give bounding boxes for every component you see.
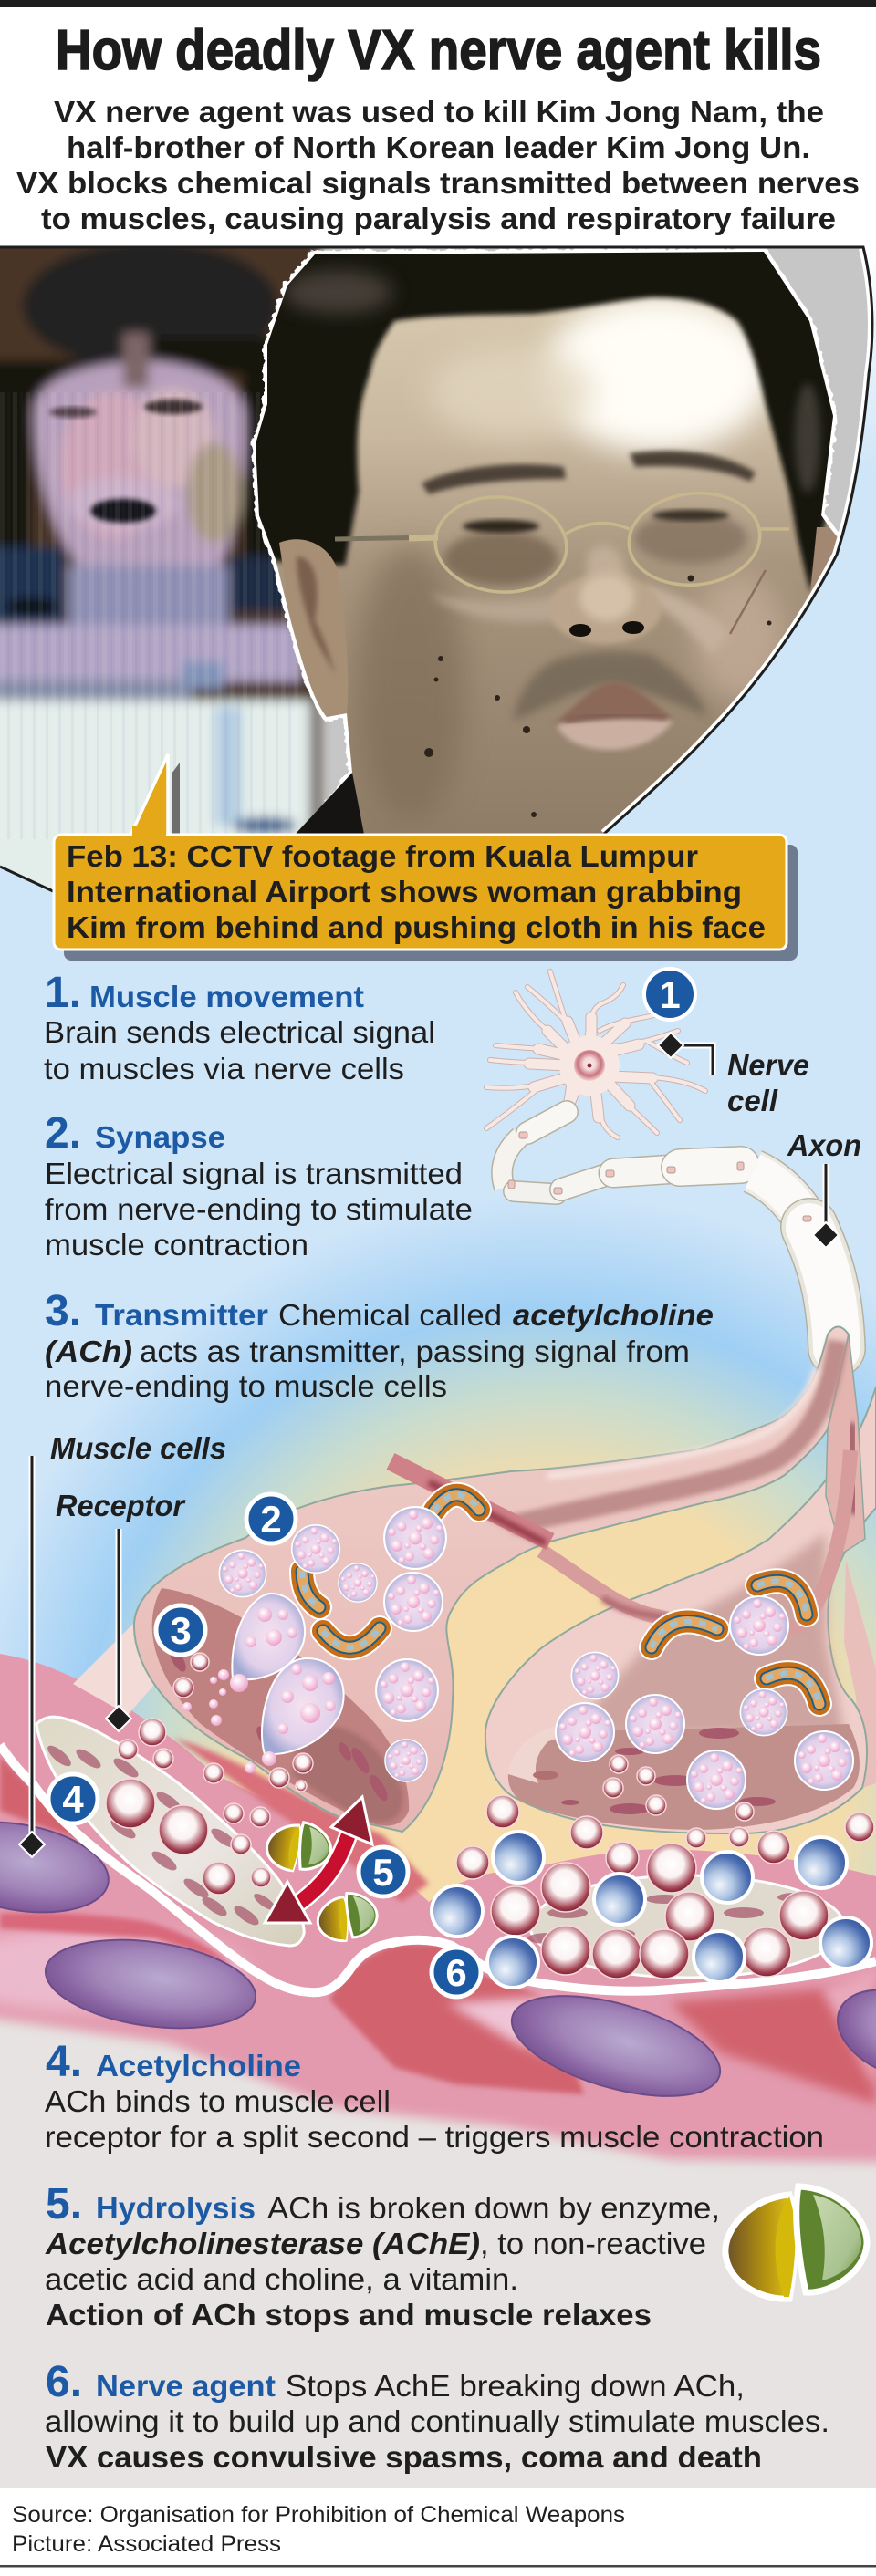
illustration: vesicles releasing ACh — [182, 1594, 344, 1773]
text block: step 3 transmitter: acetylcholine — [513, 1298, 714, 1332]
callout: CCTV caption — [54, 754, 798, 961]
number badge 6 — [432, 1948, 481, 1997]
number badge 4: 4 — [62, 1778, 84, 1821]
text block: step 6 nerve agent — [45, 2358, 829, 2474]
label: nerve cell with leader: Nerve — [727, 1048, 809, 1082]
nerve fibre — [541, 1450, 850, 1629]
cheek highlights — [429, 593, 566, 622]
text block: step 2 synapse: Synapse — [95, 1120, 225, 1154]
icon: muscle nucleus centre — [501, 1976, 731, 2116]
icon: muscle nucleus left — [0, 1809, 116, 1926]
text block: step 4 acetylcholine — [45, 2038, 824, 2154]
text block: step 5 hydrolysis: Acetylcholinesterase (AChE) — [45, 2227, 480, 2260]
eyebrows — [422, 464, 566, 494]
footer: source and credit: Picture: Associated Press — [12, 2531, 281, 2557]
lips — [552, 682, 675, 725]
illustration: muscle tissue — [0, 1623, 876, 2189]
footer: source and credit: Source: Organisation for Prohibition of Chemical Weapons — [12, 2502, 625, 2528]
icon: glasses — [335, 487, 789, 597]
intro text: VX blocks chemical signals transmitted between nerves — [16, 166, 860, 200]
illustration: nerve agent molecules — [432, 1832, 871, 1988]
illustration: acetylcholine molecules — [106, 1653, 874, 1979]
text block: step 3 transmitter: (ACh) — [45, 1335, 132, 1368]
top bar — [0, 0, 876, 7]
number badge 6: 6 — [445, 1951, 467, 1994]
number badge 5: 5 — [372, 1851, 394, 1894]
background: radial glow behind diagram — [0, 1003, 876, 2007]
text block: step 5 hydrolysis — [45, 2180, 720, 2332]
arrow: double-headed reaction arrow — [265, 1797, 372, 1923]
illustration: nerve cell — [486, 971, 705, 1137]
footer: source and credit — [0, 2488, 876, 2576]
text block: step 2 synapse — [45, 1109, 473, 1262]
text block: step 1 muscle movement: to muscles via nerve cells — [44, 1052, 404, 1085]
number badge 3 — [156, 1605, 205, 1655]
illustration: left receptor — [36, 1717, 304, 1946]
icon: AChE enzyme — [725, 2186, 867, 2299]
text block: step 2 synapse: muscle contraction — [45, 1228, 308, 1262]
number badge 2: 2 — [260, 1498, 282, 1541]
text block: step 4 acetylcholine: ACh binds to muscle cell — [45, 2084, 391, 2118]
label: receptor with leader: Receptor — [56, 1489, 186, 1522]
text block: step 3 transmitter — [45, 1287, 714, 1403]
callout: CCTV caption: Feb 13: CCTV footage from Kuala Lumpur — [67, 839, 698, 873]
label: axon with leader: Axon — [787, 1128, 861, 1162]
text block: step 4 acetylcholine: Acetylcholine — [96, 2049, 301, 2083]
hair — [246, 242, 844, 593]
number badge 1 — [644, 969, 695, 1020]
text block: step 3 transmitter: 3. — [45, 1287, 81, 1335]
text block: step 5 hydrolysis: ACh is broken down by enzyme, — [267, 2191, 720, 2225]
text block: step 2 synapse: from nerve-ending to stimulate — [45, 1192, 473, 1226]
label: axon with leader — [787, 1128, 861, 1248]
text block: step 5 hydrolysis: , to non-reactive — [480, 2227, 706, 2260]
text block: step 4 acetylcholine: receptor for a split second – triggers muscle contraction — [45, 2120, 824, 2154]
text block: step 5 hydrolysis: 5. — [46, 2180, 82, 2228]
label: muscle cells with leader — [19, 1431, 226, 1857]
number badge 4 — [48, 1774, 98, 1823]
text block: step 5 hydrolysis: acetic acid and choline, a vitamin. — [45, 2262, 518, 2296]
callout: CCTV caption: Kim from behind and pushing cloth in his face — [67, 910, 766, 944]
text block: step 1 muscle movement — [44, 969, 435, 1085]
receptor pits — [45, 1742, 810, 1944]
text block: step 6 nerve agent: Nerve agent — [96, 2369, 276, 2403]
icon: muscle nucleus right — [825, 1973, 876, 2095]
number badge 1: 1 — [659, 973, 681, 1016]
text block: step 3 transmitter: Chemical called — [278, 1298, 502, 1332]
text block: step 3 transmitter: Transmitter — [95, 1298, 268, 1332]
text block: step 6 nerve agent: VX causes convulsive spasms, coma and death — [46, 2440, 762, 2474]
text block: step 5 hydrolysis: Action of ACh stops and muscle relaxes — [46, 2298, 652, 2332]
illustration: right receptor — [530, 1875, 844, 1978]
intro text: VX nerve agent was used to kill Kim Jong Nam, the — [54, 95, 824, 129]
number badge 2 — [246, 1494, 296, 1543]
photo: Kim Jong Nam portrait — [250, 248, 839, 834]
illustration: right nerve terminal — [485, 1387, 876, 1833]
label: muscle cells with leader: Muscle cells — [50, 1431, 226, 1465]
jacket — [296, 773, 364, 834]
text block: step 3 transmitter: nerve-ending to muscle cells — [45, 1369, 447, 1403]
intro text — [16, 95, 860, 235]
text block: step 4 acetylcholine: 4. — [46, 2038, 82, 2086]
number badge 5 — [359, 1847, 408, 1896]
text block: step 1 muscle movement: Brain sends electrical signal — [44, 1015, 435, 1049]
intro text: half-brother of North Korean leader Kim Jong Un. — [67, 130, 810, 164]
photo: woman in CCTV footage — [0, 237, 319, 938]
intro text: to muscles, causing paralysis and respiratory failure — [41, 202, 836, 235]
number badge 3: 3 — [170, 1609, 192, 1652]
icon: enzyme pair upper — [264, 1818, 334, 1875]
text block: step 6 nerve agent: allowing it to build up and continually stimulate muscles. — [45, 2405, 829, 2438]
nose — [584, 545, 631, 577]
icon: enzyme pair lower — [316, 1891, 379, 1942]
fade from muscle into grey panel — [0, 2014, 876, 2499]
text block: step 1 muscle movement: Muscle movement — [89, 980, 364, 1013]
illustration: left nerve terminal and stem — [134, 1326, 865, 1832]
eye shade — [444, 531, 558, 586]
illustration: vesicles — [219, 1507, 853, 1809]
label: receptor with leader — [56, 1489, 186, 1731]
text block: step 1 muscle movement: 1. — [45, 969, 81, 1017]
illustration: muscle cell membrane — [0, 1745, 876, 1992]
photo panel: CCTV and portrait — [0, 237, 876, 938]
illustration: mitochondria — [302, 1495, 819, 1704]
text block: step 2 synapse: 2. — [45, 1109, 81, 1158]
text block: step 3 transmitter: acts as transmitter, passing signal from — [140, 1335, 690, 1368]
ear — [279, 539, 348, 717]
text block: step 5 hydrolysis: Hydrolysis — [96, 2191, 256, 2225]
skin marks — [424, 575, 772, 817]
label: nerve cell with leader — [658, 1033, 809, 1117]
label: nerve cell with leader: cell — [727, 1084, 778, 1117]
icon: muscle nucleus lower left — [40, 1927, 261, 2041]
callout: CCTV caption: International Airport shows woman grabbing — [67, 875, 742, 909]
illustration: axon — [502, 1112, 837, 1348]
text block: step 6 nerve agent: 6. — [46, 2358, 82, 2406]
text block: step 2 synapse: Electrical signal is transmitted — [45, 1157, 463, 1190]
background: sky blue upper area — [0, 246, 876, 1003]
moustache — [513, 651, 706, 721]
text block: step 6 nerve agent: Stops AchE breaking down ACh, — [286, 2369, 745, 2403]
